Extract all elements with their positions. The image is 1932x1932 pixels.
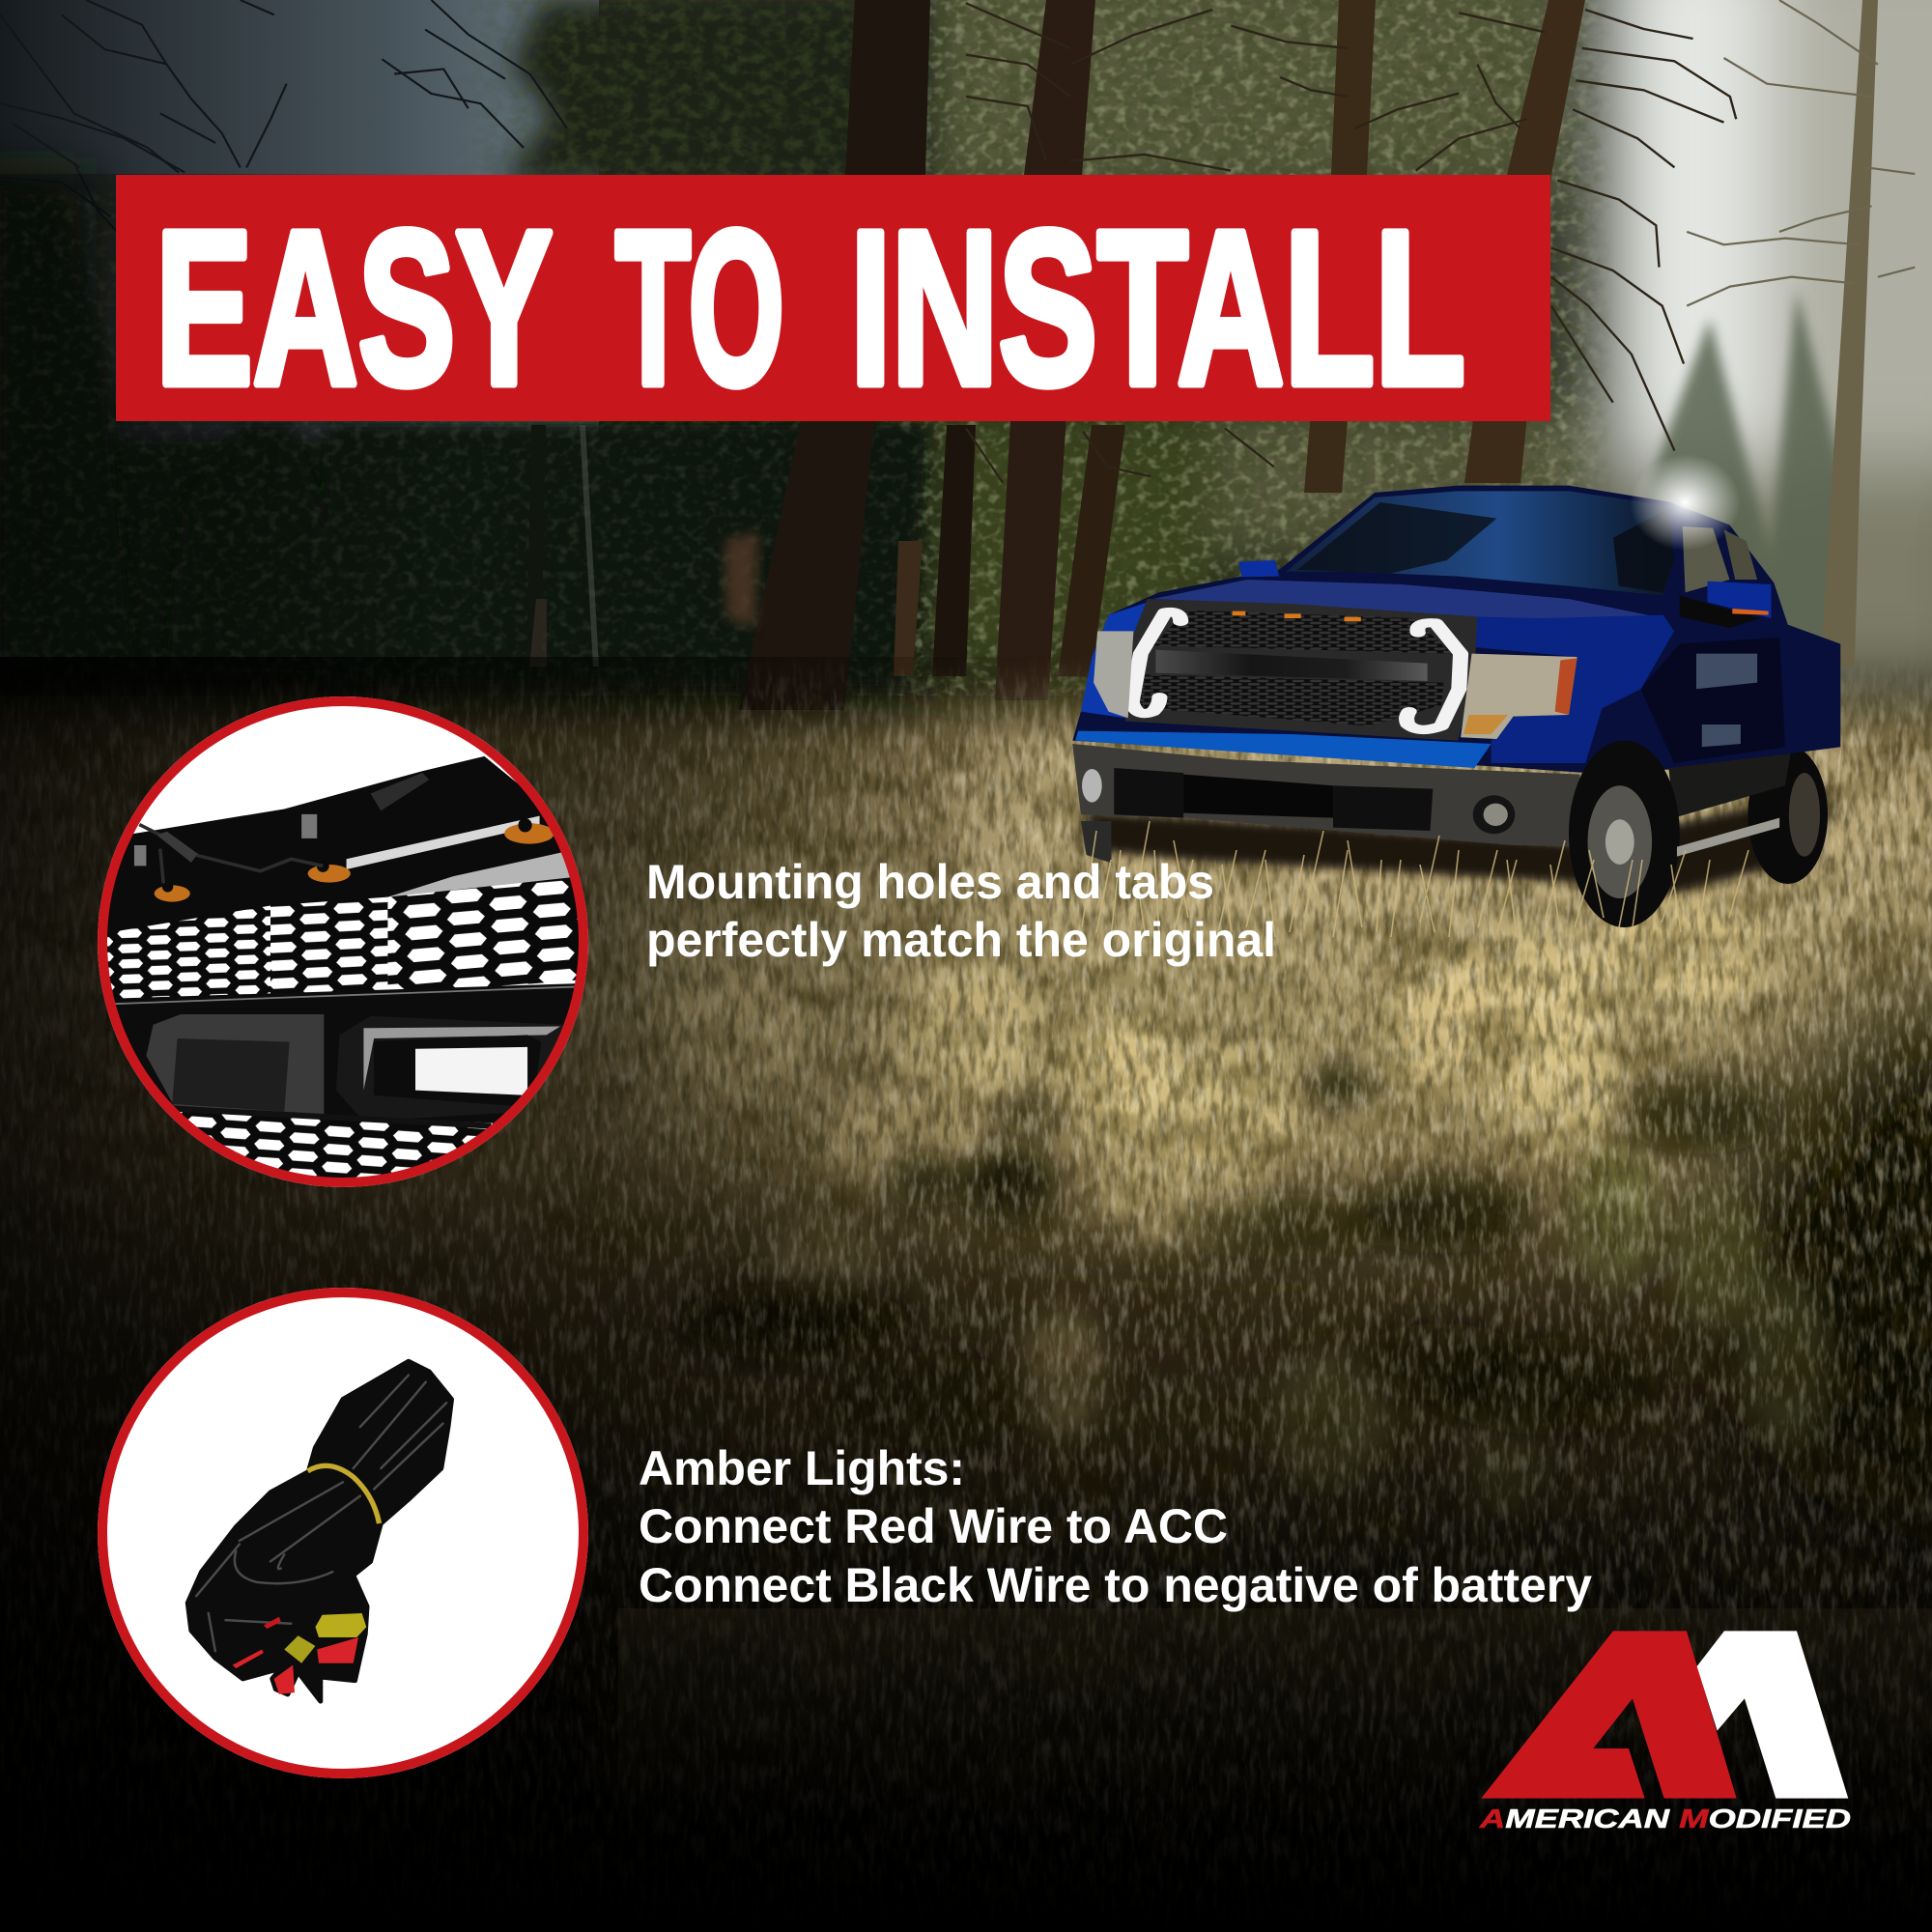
right bracket [336,1016,564,1122]
yellow connectors [315,1613,366,1637]
red connector ends [317,1637,358,1663]
greenish dim tufts [1272,1142,1831,1517]
lower mesh [146,1109,540,1187]
bumper [1072,744,1582,847]
dark evergreens [0,184,927,686]
red ring [102,1293,583,1774]
mounting caption: Mounting holes and tabs [646,855,1214,909]
bright sky and haze on the right [1594,0,1932,696]
side windows [1683,526,1729,592]
mounting caption [646,855,1276,967]
logo mark [1481,1631,1848,1799]
tree reflection in glass [1297,502,1674,592]
bare branches, top left [0,0,567,232]
dark backing for lower panel [105,983,584,1124]
grey sky at top left [0,0,599,444]
amber markers [155,823,554,902]
circle photo: grille mounting detail [98,696,588,1187]
white halo lights [1132,612,1461,729]
mounting caption: perfectly match the original [646,913,1276,967]
amber lights wiring caption: Amber Lights: [639,1441,965,1495]
mesh [105,905,284,999]
bumper black inserts [1114,768,1433,831]
lower cab [1668,753,1791,818]
amber lights wiring caption [639,1441,1592,1612]
bright tufts [676,895,1771,1435]
grass field [0,657,1932,1932]
front wheel [1569,741,1680,927]
sky and canopy light [0,0,1604,696]
sun flare [1630,454,1741,551]
under-truck shadow [1087,785,1830,895]
lighter strip below seam [618,1608,1932,1835]
right headlight [1461,654,1577,739]
amber lights [1233,611,1361,621]
grille surround [1125,599,1477,741]
red ring [102,701,583,1182]
forest shading texture [454,0,1613,696]
canopy top centre [502,0,927,184]
mirror [1680,596,1760,628]
tree trunks [526,0,1878,710]
embossed marks [134,814,317,866]
hood shine [1153,580,1663,621]
yellow rubber band [308,1465,379,1523]
title text: INSTALL [850,186,1465,431]
left bracket [146,1014,324,1115]
dark patches [679,1065,1777,1449]
logo wordmark: AMERICAN MODIFIED [1479,1804,1851,1833]
title text [156,186,1465,431]
light bar [1155,650,1428,681]
title text: EASY [156,186,553,431]
windshield [1286,491,1674,596]
fog lights [1082,769,1102,803]
side reflection [1641,638,1785,763]
wire bundle [187,1361,451,1701]
tall grass in front of truck [1082,821,1748,937]
logo: American Modified [1479,1631,1851,1833]
amber lights wiring caption: Connect Red Wire to ACC [639,1499,1228,1553]
broad light [531,676,1932,1546]
distant pines [1604,290,1845,676]
truck body [1072,486,1840,773]
pickup truck with grille [1072,454,1840,927]
overlays [0,657,1932,1932]
amber lights wiring caption: Connect Black Wire to negative of battery [639,1558,1592,1612]
title text: TO [615,186,784,431]
title banner [116,175,1550,431]
front fender blue [1474,615,1674,763]
cable gloss [196,1376,446,1651]
evergreen foliage specks [0,193,927,676]
grille top shell [105,756,578,938]
silver strip [347,816,540,869]
left headlight [1094,631,1133,718]
side step [1677,818,1779,857]
wire and connector [139,825,323,883]
branches, top right [966,3,1736,483]
rear tire [1747,746,1828,884]
fender highlight [1075,731,1492,768]
grille mesh [1153,611,1452,654]
left tire [1081,821,1111,863]
circle photo: wiring harness [98,1288,588,1778]
